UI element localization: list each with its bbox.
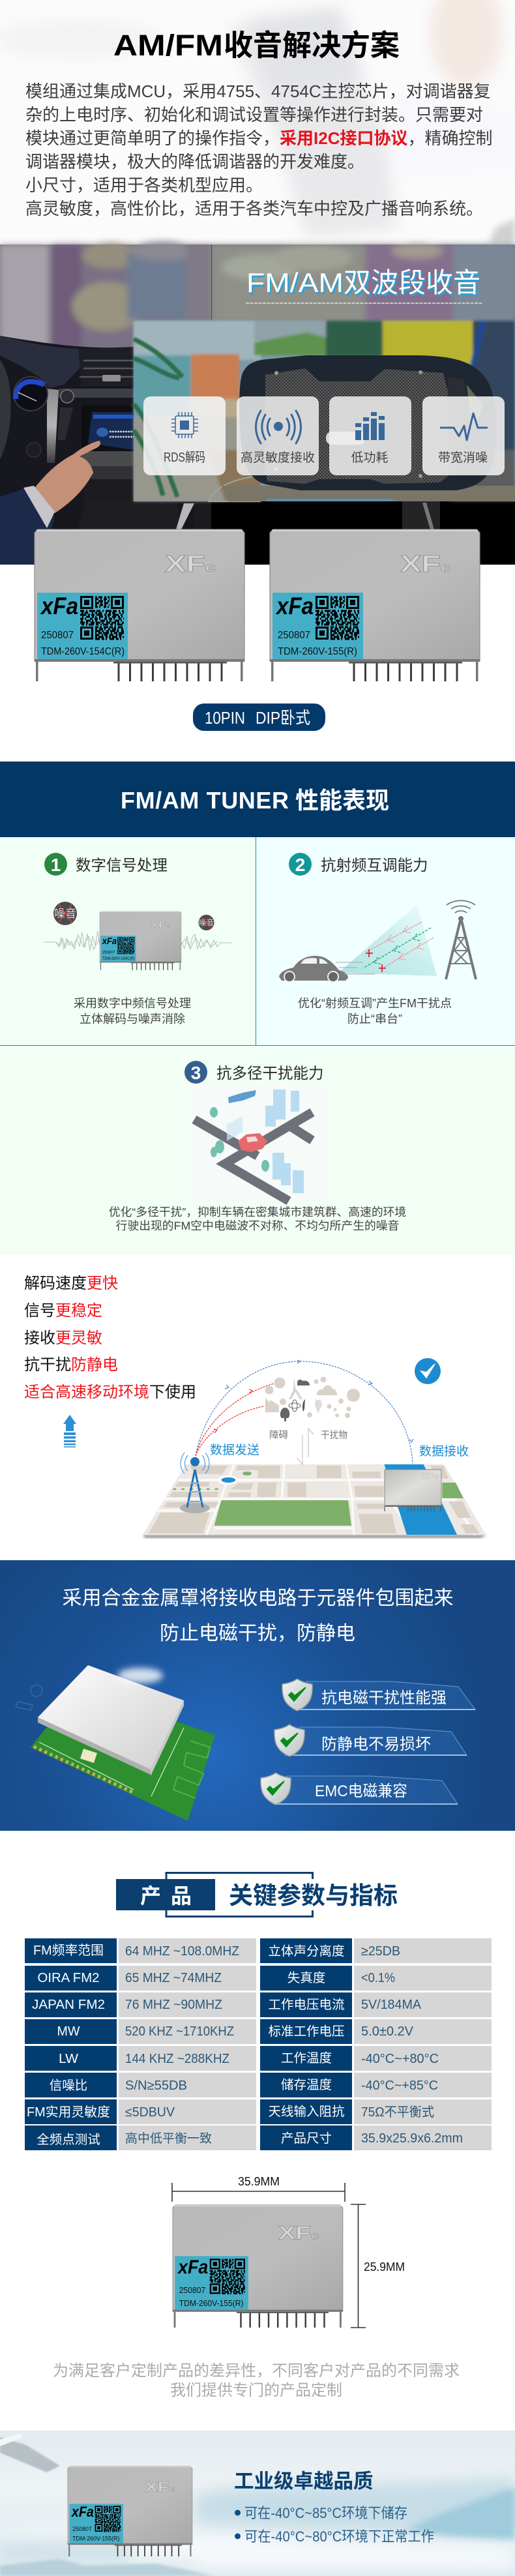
- heading: dual band: FM/AM: [246, 267, 344, 298]
- parameter values right: 35.9x25.9x6.2mm: [361, 2131, 463, 2146]
- title: 收音解决方案: [224, 29, 400, 62]
- parameter names right: 工作电压电流: [268, 1998, 345, 2012]
- label: obstacles: [269, 1429, 347, 1441]
- dimension height: 25.9MM: [364, 2260, 405, 2273]
- benefit list: [24, 1275, 196, 1401]
- badge: EMC: EMC电磁兼容: [315, 1783, 407, 1800]
- module on map: [385, 1470, 441, 1511]
- parameter values right: 5V/184MA: [361, 1998, 422, 2012]
- dimension width: [172, 2175, 345, 2202]
- intro text block: 模块通过更简单明了的操作指令，采用I2C接口协议，精确控制: [25, 128, 493, 148]
- customization text: 我们提供专门的产品定制: [170, 2382, 342, 2399]
- heading: 采用合金金属罩将接收电路于元器件包围起来: [63, 1588, 454, 1609]
- product photo: right module: [270, 529, 480, 681]
- product photo: dimension module: 250807: [179, 2286, 205, 2295]
- icon: tower: [446, 900, 476, 979]
- parameter values left: 高中低平衡一致: [125, 2131, 212, 2146]
- module image: [100, 911, 181, 970]
- heading: dual band: 双波段收音: [344, 267, 480, 298]
- card: 带宽消噪: 带宽消噪: [438, 451, 488, 465]
- product photo: right module: TDM-260V-155(R): [278, 646, 357, 657]
- customization text: [53, 2362, 460, 2399]
- parameter names left: 全频点测试: [37, 2133, 100, 2147]
- city illustration: [190, 1084, 325, 1201]
- icon: waveform: [440, 413, 488, 440]
- parameter values right: -40°C~+85°C: [361, 2079, 438, 2093]
- title: AM/FM: [113, 29, 223, 62]
- parameter values right: 5.0±0.2V: [361, 2024, 414, 2039]
- intro text block: 小尺寸，适用于各类机型应用。: [25, 175, 263, 195]
- badge: EMC: [261, 1773, 458, 1805]
- panel 1: digital signal processing: 数字信号处理: [76, 857, 168, 874]
- parameter values left: 76 MHZ ~90MHZ: [125, 1998, 222, 2012]
- card: 高灵敏度接收: 高灵敏度接收: [241, 451, 315, 465]
- badge: anti static: [274, 1725, 467, 1756]
- feature cards: [143, 396, 505, 475]
- parameter names right: 产品尺寸: [281, 2131, 332, 2146]
- signal arrows: [363, 922, 434, 972]
- bullet list: 可在-40°C~85°C环境下储存: [244, 2505, 407, 2521]
- icon: car: [279, 956, 375, 982]
- interference icons: [265, 1377, 360, 1421]
- banner: performance heading: [0, 762, 515, 837]
- banner: performance heading: 性能表现: [295, 787, 389, 814]
- label: data send: 数据发送: [210, 1443, 259, 1457]
- caption: 行驶出现的FM空中电磁波不对称、不均匀所产生的噪音: [116, 1219, 399, 1232]
- pill label: package type: DIP卧式: [256, 708, 310, 728]
- caption: [109, 1206, 406, 1232]
- signal cone: [338, 904, 437, 976]
- product photo: dimension module: xFa: [177, 2257, 208, 2278]
- parameter values left: 64 MHZ ~108.0MHZ: [125, 1944, 239, 1959]
- heading: key parameters: 品: [171, 1884, 192, 1908]
- pill label: package type: [193, 703, 325, 731]
- card: 带宽消噪: [422, 396, 505, 475]
- section: industrial quality: [0, 2431, 515, 2576]
- section: white benefits: [0, 1254, 515, 1560]
- card: RDS解码: RDS解码: [164, 450, 205, 465]
- parameter values right: [361, 1944, 463, 2146]
- number badge 2: [289, 853, 312, 876]
- card: 高灵敏度接收: [237, 396, 319, 475]
- parameter names right: 标准工作电压: [268, 2024, 345, 2039]
- parameter names right: 天线输入阻抗: [268, 2105, 345, 2119]
- card: 低功耗: [329, 396, 411, 475]
- dimension width: 35.9MM: [238, 2175, 280, 2188]
- product photo: dimension module: [173, 2205, 343, 2328]
- icon: check badge: [415, 1358, 441, 1384]
- parameter names right: [268, 1944, 345, 2146]
- benefit list: 抗干扰防静电: [24, 1356, 118, 1374]
- number badge 2: 2: [295, 855, 305, 875]
- product photo: dimension module: XF c: [278, 2223, 319, 2243]
- banner: performance heading: FM/AM TUNER: [121, 787, 289, 814]
- small decorative icons: [16, 1685, 42, 1710]
- noise badge right: [198, 915, 214, 930]
- customization text: 为满足客户定制产品的差异性，不同客户对产品的不同需求: [53, 2362, 460, 2380]
- noise badge right: 噪音: [199, 918, 214, 927]
- dimension height: [351, 2204, 405, 2328]
- caption: 防止“串台”: [347, 1013, 402, 1026]
- noise badge left: 噪音: [54, 908, 76, 920]
- product photo: dimension module: TDM-260V-155(R): [179, 2298, 244, 2308]
- heading: key parameters: 产: [140, 1884, 161, 1908]
- benefit list: 接收更灵敏: [24, 1329, 102, 1347]
- parameter values left: ≤5DBUV: [125, 2105, 175, 2120]
- pill label: package type: 10PIN: [205, 708, 245, 728]
- parameter names left: LW: [59, 2052, 78, 2066]
- parameter names left: 信噪比: [50, 2079, 87, 2093]
- card: RDS解码: [143, 396, 226, 475]
- intro text block: 模组通过集成MCU，采用4755、4754C主控芯片，对调谐器复: [25, 81, 491, 101]
- map: [143, 1464, 486, 1538]
- parameter values right: 75Ω不平衡式: [361, 2105, 434, 2120]
- product photo: module: xFa: [71, 2504, 94, 2520]
- parameter names right: 立体声分离度: [268, 1944, 345, 1959]
- parameter names left: MW: [57, 2024, 80, 2039]
- heading: [63, 1588, 454, 1644]
- badge: anti interference: [282, 1679, 475, 1711]
- parameter names left: JAPAN FM2: [32, 1998, 105, 2012]
- caption: 采用数字中频信号处理: [74, 997, 191, 1010]
- card: 低功耗: 低功耗: [351, 451, 389, 465]
- parameter values left: 144 KHZ ~288KHZ: [125, 2052, 229, 2066]
- panel 2: anti RF intermodulation: [257, 837, 515, 1045]
- badge: anti static: 防静电不易损坏: [321, 1736, 431, 1753]
- module image: TDM-260V-154C(R): [102, 956, 135, 961]
- panel 3: anti multipath: [0, 1046, 515, 1254]
- spec table: [25, 1938, 492, 2150]
- icon: chip: [171, 412, 198, 438]
- parameter values left: S/N≥55DB: [125, 2079, 187, 2093]
- intro text block: 调谐器模块，极大的降低调谐器的开发难度。: [25, 152, 364, 171]
- label: obstacles: 干扰物: [321, 1430, 347, 1441]
- parameter names left: FM频率范围: [33, 1943, 104, 1958]
- product photo: module: TDM-260V-155(R): [72, 2536, 119, 2543]
- label: data receive: 数据接收: [419, 1444, 469, 1458]
- heading: 防止电磁干扰，防静电: [160, 1623, 355, 1644]
- number badge 3: 3: [191, 1063, 201, 1083]
- benefit list: 信号更稳定: [24, 1302, 102, 1320]
- product photo: left module: xFa: [40, 593, 78, 619]
- module illustration: [31, 1665, 215, 1821]
- noise waves: [44, 931, 232, 951]
- caption: 立体解码与噪声消除: [80, 1013, 185, 1026]
- caption: [298, 997, 452, 1026]
- benefit list: 解码速度更快: [24, 1275, 118, 1292]
- product photo: left module: 250807: [41, 630, 74, 641]
- bullet list: 可在-40°C~80°C环境下正常工作: [244, 2528, 434, 2545]
- heading: 工业级卓越品质: [234, 2470, 373, 2493]
- icon: up arrow: [63, 1415, 76, 1447]
- module image: XF c: [151, 919, 170, 930]
- dashboard photo: [0, 336, 211, 565]
- signal arcs: [196, 1360, 413, 1464]
- product photo: right module: xFa: [275, 593, 314, 619]
- number badge 3: [184, 1061, 207, 1084]
- product photo: right module: XF c: [400, 550, 450, 577]
- parameter names right: 储存温度: [281, 2078, 332, 2092]
- product photo: left module: XF c: [165, 550, 215, 577]
- panel 2: anti RF intermodulation: 抗射频互调能力: [321, 857, 428, 874]
- module image: xFa: [102, 936, 117, 947]
- caption: 优化“多径干扰”，抑制车辆在密集城市建筑群、高速的环境: [109, 1206, 406, 1219]
- title: [113, 29, 400, 62]
- parameter values right: <0.1%: [361, 1971, 395, 1985]
- intro text block: 杂的上电时序、初始化和调试设置等操作进行封装。只需要对: [25, 105, 483, 125]
- parameter values right: ≥25DB: [361, 1944, 400, 1959]
- label: obstacles: 障碍: [269, 1429, 288, 1441]
- parameter names right: 失真度: [287, 1971, 325, 1985]
- module on map: XFo: [422, 1472, 439, 1481]
- intro text block: [25, 81, 493, 218]
- heading: dual band: [246, 267, 480, 298]
- heading: key parameters: 关键参数与指标: [229, 1882, 398, 1909]
- product photo: left module: [35, 529, 244, 681]
- intro text block: 高灵敏度，高性价比，适用于各类汽车中控及广播音响系统。: [25, 199, 483, 218]
- parameter values left: 520 KHZ ~1710KHZ: [125, 2024, 234, 2039]
- section: metal shield: [0, 1560, 515, 1831]
- parameter names left: [27, 1943, 110, 2147]
- table cells: [25, 1938, 492, 2150]
- number badge 1: [44, 853, 67, 876]
- parameter names left: FM实用灵敏度: [27, 2105, 110, 2120]
- number badge 1: 1: [51, 855, 61, 875]
- panel: dual band photo background: [0, 241, 515, 565]
- speaker photo: [134, 321, 515, 501]
- caption: [74, 997, 191, 1026]
- product photo: module: XF c: [145, 2479, 175, 2495]
- parameter names left: OIRA FM2: [38, 1971, 99, 1985]
- icon: radio tower: [180, 1453, 210, 1513]
- product photo: left module: TDM-260V-154C(R): [41, 646, 125, 657]
- caption: 优化“射频互调”产生FM干扰点: [298, 997, 452, 1010]
- panel 1: digital signal processing: [0, 837, 256, 1045]
- badge: anti interference: 抗电磁干扰性能强: [321, 1689, 447, 1707]
- parameter values right: -40°C~+80°C: [361, 2052, 439, 2066]
- icon: signal: [256, 411, 301, 443]
- product photo: module: 250807: [72, 2526, 92, 2532]
- panel 3: anti multipath: 抗多径干扰能力: [216, 1065, 323, 1082]
- section: intro background: [0, 0, 515, 244]
- benefit list: 适合高速移动环境下使用: [24, 1384, 196, 1401]
- parameter values left: [125, 1944, 239, 2146]
- parameter names right: 工作温度: [281, 2051, 332, 2065]
- product photo: right module: 250807: [278, 630, 310, 641]
- module image: 250807: [102, 951, 115, 955]
- heading: key parameters: [116, 1873, 398, 1917]
- parameter values left: 65 MHZ ~74MHZ: [125, 1971, 222, 1985]
- product photo: module: [68, 2466, 192, 2556]
- icon: bars: [355, 412, 385, 440]
- bullet list: [235, 2505, 434, 2545]
- noise badge left: [53, 902, 77, 925]
